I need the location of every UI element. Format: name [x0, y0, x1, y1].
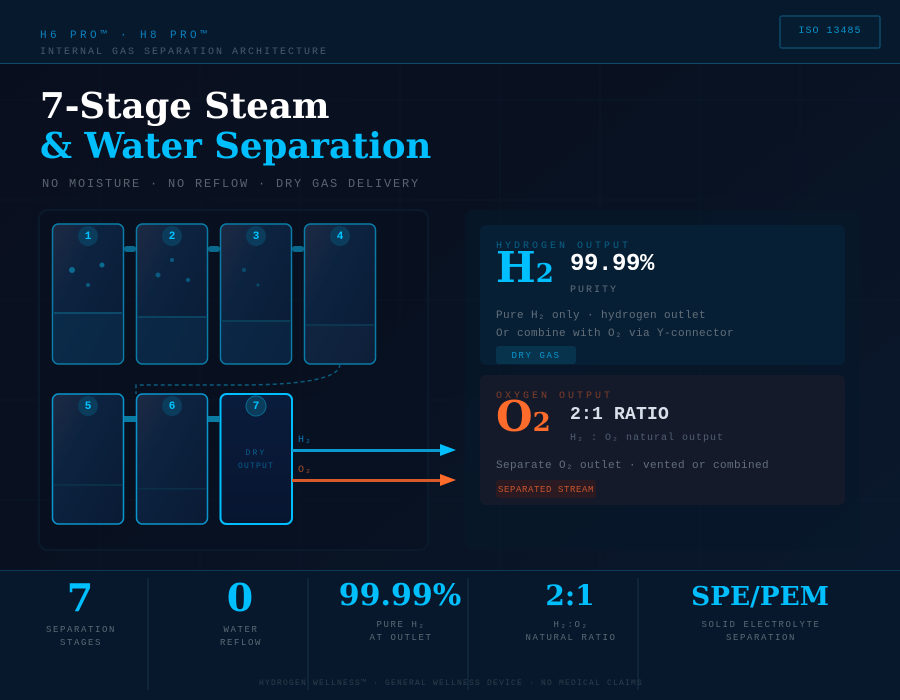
- purity label: PURITY: [570, 285, 618, 296]
- purity value: 99.99%: [570, 251, 654, 278]
- stat: SPE/PEM: SOLID ELECTROLYTE: [701, 620, 820, 630]
- stat: natural ratio: H₂:O₂: [553, 620, 588, 630]
- tag: separated stream: [496, 480, 596, 498]
- stage 7: dry output: DRY: [245, 449, 266, 458]
- stage 7: dry output: [220, 393, 293, 525]
- stat: pure H2: [339, 578, 461, 643]
- arrow: H2 output: H₂: [298, 435, 312, 446]
- badge: ISO 13485: [779, 15, 881, 49]
- stats band: [0, 570, 900, 700]
- panel: gas outputs: [465, 210, 860, 550]
- stage 1: [52, 223, 124, 365]
- stat: separation stages: 7: [67, 575, 93, 620]
- stage 3: [220, 223, 292, 365]
- stage 6: 6: [169, 401, 175, 413]
- ratio note: H₂ : O₂ natural output: [570, 433, 724, 444]
- main title: 7-Stage Steam: [40, 86, 329, 127]
- arrow: return path from stage 4 to stage 5: [135, 364, 341, 394]
- stat: water reflow: REFLOW: [220, 638, 262, 648]
- stat: natural ratio: [525, 579, 616, 643]
- stat: separation stages: STAGES: [60, 638, 102, 648]
- badge: ISO 13485: ISO 13485: [798, 26, 862, 37]
- oxygen description: Separate O₂ outlet · vented or combined: [496, 460, 769, 472]
- stat: separation stages: SEPARATION: [46, 625, 116, 635]
- stat: SPE/PEM: SEPARATION: [726, 633, 796, 643]
- stage 6: [136, 393, 208, 525]
- stage 7: dry output: OUTPUT: [238, 462, 274, 471]
- stage 1: 1: [85, 231, 91, 243]
- stage 2: 2: [169, 231, 175, 243]
- stat: water reflow: 0: [227, 575, 253, 620]
- stat: separation stages: [46, 575, 116, 648]
- stat: water reflow: [220, 575, 262, 648]
- stage 3: 3: [253, 231, 259, 243]
- oxygen label: OXYGEN OUTPUT: [496, 391, 613, 402]
- header band: [0, 0, 900, 64]
- stat: pure H2: PURE H₂: [376, 620, 426, 630]
- stat: SPE/PEM: [691, 581, 829, 643]
- stage 4: 4: [337, 231, 343, 243]
- hydrogen description: Pure H₂ only · hydrogen outlet: [496, 310, 706, 322]
- main title: & Water Separation: [40, 126, 431, 167]
- stage 7: dry output: 7: [253, 401, 259, 413]
- card: oxygen output: [480, 375, 845, 505]
- tagline: NO MOISTURE · NO REFLOW · DRY GAS DELIVERY: [42, 177, 420, 191]
- arrow: O2 output: O₂: [298, 465, 312, 476]
- stat: pure H2: AT OUTLET: [369, 633, 432, 643]
- oxygen symbol: O2: [496, 392, 551, 441]
- stat: natural ratio: 2:1: [545, 579, 595, 612]
- hydrogen description: [496, 310, 734, 340]
- stage 4: [304, 223, 376, 365]
- stat: natural ratio: NATURAL RATIO: [525, 633, 616, 643]
- stage 5: 5: [85, 401, 91, 413]
- stage 5: [52, 393, 124, 525]
- tag: dry gas: [496, 346, 576, 364]
- card: hydrogen output: [480, 225, 845, 365]
- header title: H6 PRO™ · H8 PRO™: [40, 30, 210, 42]
- tag: dry gas: DRY GAS: [511, 351, 560, 361]
- header subtitle: INTERNAL GAS SEPARATION ARCHITECTURE: [40, 47, 328, 58]
- stat: water reflow: WATER: [223, 625, 258, 635]
- stage 2: [136, 223, 208, 365]
- arrow: H2 output: [292, 435, 456, 456]
- panel: separation stages diagram: [38, 209, 429, 551]
- hydrogen description: Or combine with O₂ via Y-connector: [496, 328, 734, 340]
- tag: separated stream: SEPARATED STREAM: [498, 485, 594, 495]
- stat: pure H2: 99.99%: [339, 578, 461, 613]
- ratio value: 2:1 RATIO: [570, 405, 669, 425]
- connectors between stages: [124, 246, 304, 422]
- arrow: O2 output: [292, 465, 456, 486]
- hydrogen symbol: H2: [496, 243, 554, 292]
- footer note: HYDROGEN WELLNESS™ · GENERAL WELLNESS DEVICE · NO MEDICAL CLAIMS: [259, 679, 643, 688]
- stat: SPE/PEM: SPE/PEM: [691, 581, 829, 612]
- main title: [40, 86, 431, 167]
- hydrogen label: HYDROGEN OUTPUT: [496, 241, 631, 252]
